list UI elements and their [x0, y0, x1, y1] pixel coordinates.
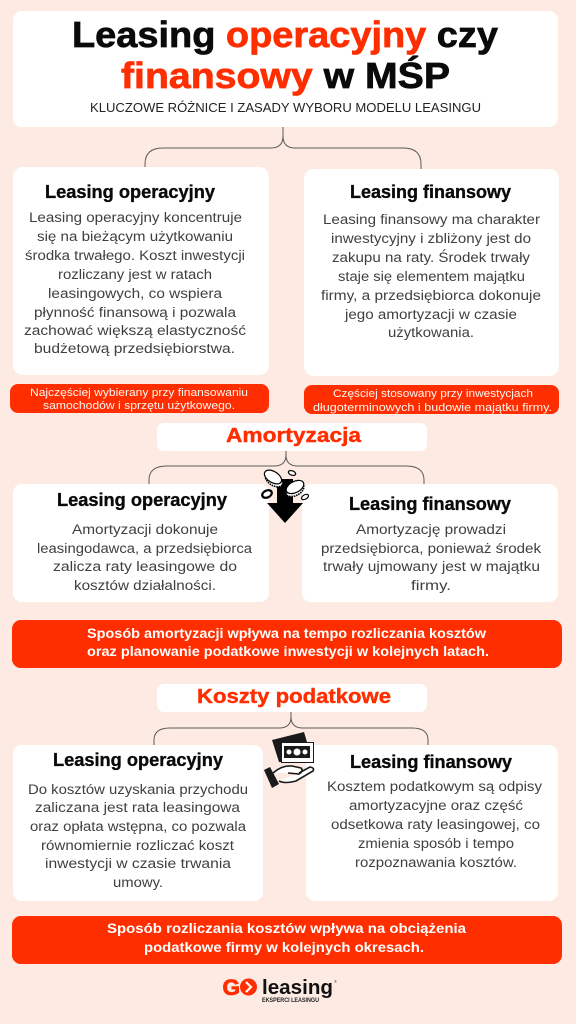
callout: right note: długoterminowych i budowie majątku firmy.: [313, 402, 552, 414]
heading: Leasing operacyjny: [57, 490, 227, 510]
text block: zalicza raty leasingowe do: [53, 559, 237, 575]
text block: środka trwałego. Koszt inwestycji: [25, 248, 245, 264]
text block: [28, 782, 248, 891]
callout: left note: [10, 384, 269, 413]
text block: staje się elementem majątku: [338, 269, 525, 285]
banner: amortization note: Sposób amortyzacji wpływa na tempo rozliczania kosztów: [87, 626, 486, 641]
text block: oraz opłata wstępna, co pozwala: [30, 819, 246, 835]
panel: amortyzacja operacyjny: [13, 484, 269, 602]
text block: firmy, a przedsiębiorca dokonuje: [321, 288, 541, 304]
logo: Go leasing: leasing: [262, 977, 333, 999]
panel: koszty operacyjny: [13, 745, 263, 901]
banner: tax note: podatkowe firmy w kolejnych okresach.: [144, 940, 424, 955]
logo: Go leasing: EKSPERCI LEASINGU: [262, 998, 319, 1004]
text block: rozpoznawania kosztów.: [355, 855, 517, 871]
text block: Leasing operacyjny koncentruje: [29, 210, 242, 226]
text block: się na bieżącym użytkowaniu: [37, 229, 233, 245]
text block: budżetową przedsiębiorstwa.: [34, 341, 235, 357]
text block: równomiernie rozliczać koszt: [41, 838, 234, 854]
banner: amortization note: oraz planowanie podatkowe inwestycji w kolejnych latach.: [87, 644, 489, 659]
heading: Koszty podatkowe: [157, 684, 427, 712]
panel: title: [13, 11, 558, 127]
text block: odsetkowa raty leasingowej, co: [331, 817, 540, 833]
text block: zakupu na raty. Środek trwały: [332, 248, 531, 266]
heading: main title: finansowy w MŚP: [121, 54, 450, 96]
text block: płynność finansową i pozwala: [34, 305, 236, 321]
callout: left note: samochodów i sprzętu użytkowego.: [43, 400, 235, 412]
text block: zmienia sposób i tempo: [358, 836, 514, 852]
logo: Go leasing: ®: [334, 979, 337, 984]
banner: tax note: Sposób rozliczania kosztów wpływa na obciążenia: [107, 921, 466, 936]
panel: leasing finansowy: [304, 169, 559, 376]
text block: trwały ujmowany jest w majątku: [323, 559, 540, 575]
text block: inwestycji w czasie trwania: [45, 856, 231, 872]
text block: Leasing finansowy ma charakter: [323, 212, 540, 228]
logo: Go leasing: G: [222, 975, 240, 1000]
text block: leasingodawca, a przedsiębiorca: [37, 541, 252, 557]
text block: inwestycyjny i zbliżony jest do: [331, 231, 531, 247]
icon: coins and down arrow: [261, 467, 309, 523]
text block: amortyzacyjne oraz część: [349, 798, 523, 814]
panel: leasing operacyjny: [13, 167, 269, 375]
icon: hand holding cash: [264, 732, 314, 788]
text block: [321, 522, 542, 594]
callout: right note: [304, 385, 559, 414]
callout: right note: Częściej stosowany przy inwestycjach: [333, 388, 533, 400]
text block: [327, 779, 543, 871]
text block: kosztów działalności.: [74, 578, 216, 594]
text block: zachować większą elastyczność: [24, 323, 246, 339]
text block: Amortyzacji dokonuje: [72, 522, 218, 538]
heading: Amortyzacja: [157, 423, 427, 451]
text block: Do kosztów uzyskania przychodu: [28, 782, 248, 798]
text block: umowy.: [113, 875, 163, 891]
heading: Leasing operacyjny: [45, 182, 215, 202]
connector: Koszty podatkowe to cards: [154, 712, 428, 745]
text block: zaliczana jest rata leasingowa: [35, 800, 240, 816]
connector: Amortyzacja to cards: [149, 451, 424, 485]
heading: Leasing finansowy: [350, 182, 511, 202]
text block: jego amortyzacji w czasie: [344, 307, 517, 323]
heading: Leasing finansowy: [350, 752, 512, 772]
text block: rozliczany jest w ratach: [58, 267, 212, 283]
subtitle: KLUCZOWE RÓŻNICE I ZASADY WYBORU MODELU LEASINGU: [90, 100, 481, 115]
heading: Leasing operacyjny: [53, 750, 223, 770]
text block: firmy.: [411, 578, 451, 594]
text block: [321, 212, 541, 341]
text block: Amortyzację prowadzi: [356, 522, 506, 538]
text block: leasingowych, co wspiera: [48, 286, 222, 302]
panel: amortyzacja finansowy: [302, 484, 558, 602]
callout: left note: Najczęściej wybierany przy finansowaniu: [30, 387, 248, 399]
heading: Koszty podatkowe: Koszty podatkowe: [197, 686, 391, 708]
logo: Go leasing: [222, 975, 337, 1004]
text block: użytkowania.: [388, 325, 474, 341]
heading: Leasing finansowy: [349, 494, 511, 514]
banner: tax note: [12, 916, 562, 964]
text block: [24, 210, 246, 357]
heading: main title: [72, 14, 498, 96]
heading: Amortyzacja: Amortyzacja: [226, 425, 362, 447]
text block: Kosztem podatkowym są odpisy: [327, 779, 543, 795]
connector: title to cards: [145, 127, 421, 170]
panel: koszty finansowy: [306, 745, 558, 901]
text block: przedsiębiorca, ponieważ środek: [321, 541, 542, 557]
text block: [37, 522, 252, 594]
heading: main title: Leasing operacyjny czy: [72, 14, 498, 55]
banner: amortization note: [12, 620, 562, 668]
